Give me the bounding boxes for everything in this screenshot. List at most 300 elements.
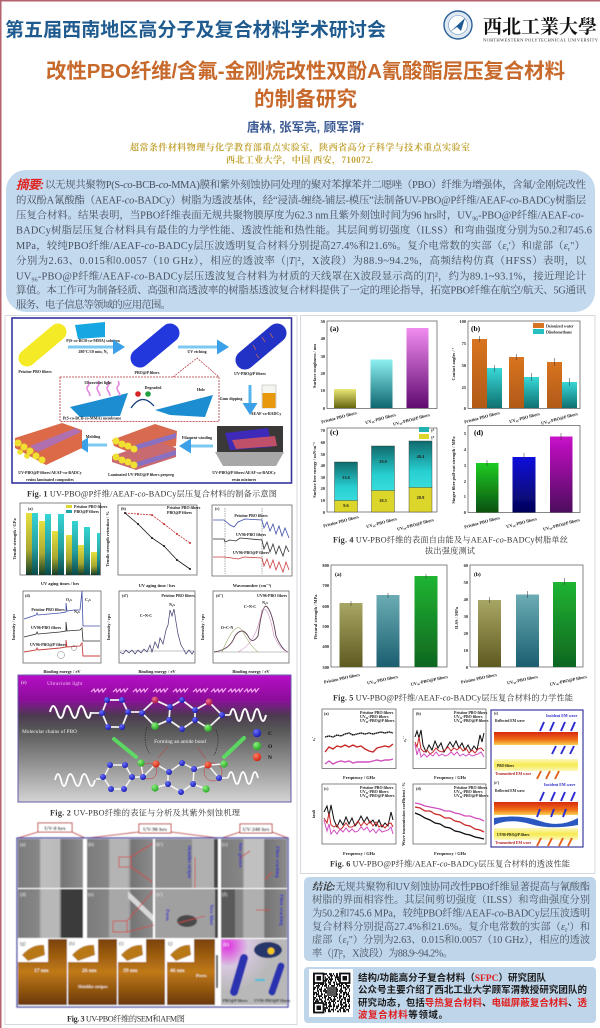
chart: loss tangent (c) — [311, 784, 396, 856]
chart: transmission coefficient (d): UV₉₆-PBO fibers — [454, 789, 483, 794]
chart: real permittivity (a): UV₉₆-PBO@P fibers — [360, 718, 395, 723]
chart: contact angle (b): UV₉₆-PBO fibers — [509, 411, 541, 424]
chart: FTIR spectra (c): (c) — [215, 506, 220, 511]
chart: surface free energy (c): 60 — [321, 440, 326, 445]
chart: XPS N1s pristine (d'): Pristine PBO fibers — [161, 593, 195, 598]
chart: contact angle (b): UV₉₆-PBO@P fibers — [540, 411, 579, 426]
chart: contact angle (b): 50 — [462, 363, 467, 368]
affiliation: 西北工业大学，中国 西安，710072. — [226, 154, 373, 166]
figure 2: characterisation charts — [11, 503, 292, 674]
chart: XPS N1s pristine (d'): (d') — [122, 593, 129, 598]
chart: strength retention lines (b): PBO@P fibers — [167, 510, 192, 515]
university logo — [444, 11, 599, 42]
icon: PBO@P fiber — [135, 333, 170, 375]
callout: UV etching mechanism: P(S-co-BCB-co-MMA) membrane — [63, 416, 121, 420]
conclusion text: 结论:无规共聚物和UV刻蚀协同改性PBO纤维显著提高与氰酸酯 — [312, 880, 590, 893]
icon: laminated prepreg: Laminated UV-PBO@P fibers prepreg — [108, 472, 174, 477]
icon: PBO@P fiber: PBO@P fibers — [135, 370, 160, 375]
chart: ILSS (b): 0 — [466, 665, 469, 670]
abstract text: UV — [16, 272, 31, 282]
chart: transmission coefficient (d): UV₉₆-PBO@P fibers — [454, 793, 489, 798]
chart: imaginary permittivity (b): UV₉₆-PBO@P fibers — [454, 718, 489, 723]
chart: surface roughness (a): 30 — [321, 354, 326, 359]
icon: resin tray: resin mixtures — [232, 477, 257, 482]
chart: pull-out strength (d): 1 — [464, 494, 466, 499]
AFM images: (i) — [119, 942, 124, 947]
chart: surface free energy (c): Pristine PBO fibers — [323, 514, 360, 528]
caption: fig 6: Fig. 6 UV-PBO@P纤维/AEAF-co-BADCy层压复合材料的透波性能 — [330, 858, 570, 868]
abstract text: 96 — [31, 278, 38, 284]
figure 3: SEM and AFM — [17, 823, 290, 1007]
callout: UV etching mechanism: Degraded — [145, 385, 162, 390]
abstract text: r — [507, 247, 509, 253]
chart: real permittivity (a): Frequency / GHz — [343, 775, 375, 780]
chart: FTIR spectra (c) — [212, 505, 292, 588]
chart: loss tangent (c): (c) — [324, 786, 329, 791]
chart: tensile strength bars (a): Pristine PBO fibers — [74, 504, 108, 509]
caption: fig 2: Fig. 2 UV-PBO纤维的表征与分析及其紫外刻蚀机理 — [50, 808, 241, 818]
conclusion text — [312, 880, 590, 960]
poster title: 的制备研究 — [254, 87, 357, 111]
chart: XPS N1s UV (d''): UV96-PBO fibers — [257, 593, 287, 598]
chart: pull-out strength (d): 3 — [464, 463, 467, 468]
schematic: EM wave transmission (e): Transmitted EM wave — [495, 841, 532, 845]
chart: XPS N1s pristine (d') — [106, 591, 195, 674]
chart: XPS N1s UV (d''): Intensity / cps — [200, 614, 205, 640]
abstract text: MPa，较纯PBO纤维/AEAF-co-BADCy层压波透明复合材料分别提高27.4%和21.6%。复介电常数的实部（ε — [16, 241, 506, 252]
chart: XPS survey (d): UV96-PBO@P fibers — [30, 642, 66, 647]
team description: 波复合材料等领域。 — [358, 1009, 448, 1021]
chart: surface free energy (c): UV₉₆-PBO fibers — [366, 516, 398, 529]
abstract text: ε — [564, 241, 569, 252]
figure 4: surface properties — [312, 319, 581, 532]
chart: flexural strength (a) — [313, 563, 448, 687]
chart: surface free energy (c): 38.0 — [379, 459, 388, 464]
abstract text: 的双酚A氰酸酯（AEAF-co-BADCy）树脂为透波基体，经“浸渍-缠绕-铺层-模压”法制备UV-PBO@P纤维/AEAF-co-BADCy树脂层 — [16, 194, 587, 206]
conclusion text: 复合材料分别提高27.4%和21.6%。复介电常数的实部（ε — [312, 922, 565, 933]
chart: surface free energy (c) — [312, 427, 437, 532]
QR code — [309, 969, 353, 1017]
UV light label: Ultraviolet light — [47, 681, 83, 687]
team description: 研究动态，包括导热复合材料、电磁屏蔽复合材料、透 — [358, 997, 587, 1009]
schematic k: fiber etching: (k) — [223, 943, 229, 948]
chart: surface free energy (c): 40 — [321, 463, 326, 468]
abstract text: 以无规共聚物P(S-co-BCB-co-MMA)膜和紫外刻蚀协同处理的聚对苯撑苯并二噁唑（PBO）纤维为增强体，含氟/金刚烷改性 — [45, 178, 587, 191]
affiliation — [130, 142, 470, 166]
abstract text — [16, 178, 592, 311]
amide bond annotation: Forming an amide bond — [154, 739, 206, 745]
chart: imaginary permittivity (b): εᵣ'' — [402, 736, 407, 742]
chart: surface free energy (c): 50 — [321, 452, 326, 457]
chart: flexural strength (a): UV₉₆-PBO fibers — [367, 674, 398, 685]
chart: ILSS (b): 40 — [464, 597, 469, 602]
chart: surface roughness (a): (a) — [330, 324, 339, 333]
chart: imaginary permittivity (b): (b) — [416, 711, 422, 716]
chart: surface free energy (c): 18.5 — [379, 498, 388, 503]
chart: flexural strength (a): Pristine PBO fibers — [323, 672, 360, 685]
AFM images — [18, 939, 218, 1005]
chart: XPS survey (d): N₁s — [74, 609, 80, 614]
chart: surface free energy (c): 9.6 — [343, 503, 350, 508]
chart: ILSS (b): 30 — [464, 614, 469, 619]
chart: flexural strength (a): 400 — [322, 644, 330, 649]
time labels: UV-0 hrs — [44, 826, 66, 832]
panel letter: (e) — [21, 681, 27, 686]
legend: atoms: C — [268, 731, 272, 737]
callout: UV etching mechanism — [60, 358, 219, 422]
chart: XPS N1s pristine (d'): C=N-C — [140, 613, 152, 618]
arrow: molding — [79, 434, 107, 445]
abstract label: 摘要: — [16, 178, 44, 192]
chart: flexural strength (a): (a) — [335, 571, 342, 578]
panel: conclusion — [304, 877, 596, 961]
SEM image grid: (a) — [20, 843, 26, 848]
chart: tensile strength bars (a): Tensile strength / GPa — [12, 518, 17, 560]
chart: strength retention lines (b): UV aging time / hrs — [139, 583, 176, 588]
schematic: EM wave transmission (e): Reflected EM wave — [495, 719, 525, 723]
chart: surface free energy (c): 10 — [321, 498, 326, 503]
chart: ILSS (b): 50 — [464, 580, 469, 585]
chart: XPS N1s UV (d'') — [200, 591, 289, 674]
green etching beams — [114, 738, 244, 757]
abstract text: BADCy树脂层压复合材料具有最佳的力学性能、透波性能和热性能。其层间剪切强度（ILSS）和弯曲强度分别为50.2和745.6 — [16, 224, 592, 236]
chart: surface roughness (a): UV₉₆-PBO fibers — [365, 412, 397, 425]
SEM image grid: (d) — [20, 893, 26, 898]
schematic: EM wave transmission (e): Incident EM wave — [544, 782, 576, 787]
abstract text: 算值。本工作可为制备轻质、高强和高透波率的树脂基透波复合材料提供了一定的理论指导，拓宽PBO纤维在航空/航天、5G通讯 — [16, 284, 587, 296]
icon: UV-PBO@P fiber: UV-PBO@P fibers — [234, 371, 266, 376]
chart: pull-out strength (d): 5 — [464, 431, 467, 436]
team description — [358, 972, 587, 1021]
abstract text: -PBO@P纤维/AEAF- — [478, 208, 571, 222]
chart: ILSS (b): 10 — [464, 648, 469, 653]
conference heading: 第五届西南地区高分子及复合材料学术研讨会 — [5, 18, 386, 41]
chart: XPS N1s pristine (d'): Intensity / cps — [106, 614, 111, 640]
schematic: EM wave transmission (e): UV96-PBO@P fibers — [497, 833, 530, 837]
chart: surface free energy (c): γᵈ — [430, 428, 435, 432]
AFM images: (g) — [20, 942, 26, 947]
arrow: filament winding — [182, 435, 213, 446]
icon: resin tray: UV-PBO@P fibers/AEAF-co-BADCy — [212, 470, 276, 475]
conclusion text: r — [565, 926, 568, 934]
SEM image grid: Pores — [164, 909, 169, 921]
chart: pull-out strength (d): 4 — [464, 447, 467, 452]
chart: XPS survey (d): UV96-PBO fibers — [31, 625, 61, 630]
chart: FTIR spectra (c): Pristine PBO fibers — [234, 513, 268, 518]
chart: contact angle (b): 0 — [464, 406, 467, 411]
chart: tensile strength bars (a): UV aging times / hrs — [41, 581, 79, 586]
chart: imaginary permittivity (b): UV₉₆-PBO fibers — [454, 714, 483, 719]
chart: surface roughness (a): 20 — [321, 371, 326, 376]
SEM image grid: (e) — [88, 893, 94, 898]
callout: UV etching mechanism: Ultraviolet light — [84, 380, 112, 385]
chart: real permittivity (a): UV₉₆-PBO fibers — [360, 714, 389, 719]
chart: strength retention lines (b): (b) — [121, 506, 127, 511]
time labels: UV-96 hrs — [143, 827, 167, 833]
icon: laminated prepreg — [108, 424, 177, 477]
icon: pristine PBO fiber — [18, 332, 58, 374]
poster title: 改性PBO纤维/含氟-金刚烷改性双酚A氰酸酯层压复合材料 — [46, 59, 566, 83]
chart: XPS survey (d) — [11, 591, 101, 674]
amide bond annotation — [141, 727, 222, 781]
AFM images: 39 nm — [123, 968, 138, 974]
chart: surface roughness (a): 40 — [321, 336, 326, 341]
callout: UV etching mechanism: Hole — [197, 387, 205, 392]
chart: contact angle (b): Deionized water — [546, 324, 574, 328]
figure 2 panel e: UV etching mechanism — [18, 675, 291, 802]
SEM image grid: Fiber cracking — [274, 846, 279, 878]
chart: contact angle (b): Pristine PBO fibers — [464, 410, 501, 424]
conclusion text: 率（|T|²，X波段）为88.9~94.2%。 — [312, 946, 453, 960]
schematic: EM wave transmission (e): Reflected EM wave — [495, 789, 525, 793]
chart: surface free energy (c): UV₉₆-PBO@P fibers — [396, 517, 435, 532]
chart: transmission coefficient (d): Frequency / GHz — [434, 851, 466, 856]
caption: fig 1: Fig. 1 UV-PBO@P纤维/AEAF-co-BADCy层压复合材料的制备示意图 — [27, 488, 277, 498]
team description: 结构/功能高分子复合材料（SFPC）研究团队 — [358, 972, 546, 984]
chart: surface free energy (c): (c) — [330, 428, 339, 436]
arrow: filament winding: Filament winding — [182, 435, 212, 440]
AFM images: 26 nm — [82, 968, 97, 974]
chart: ILSS (b): 20 — [464, 631, 469, 636]
chart: pull-out strength (d): UV₉₆-PBO@P fibers — [542, 517, 581, 532]
chart: flexural strength (a): Flexural strength / MPa — [313, 594, 318, 639]
chart: loss tangent (c): UV₉₆-PBO fibers — [360, 789, 389, 794]
chart: XPS survey (d): Pristine PBO fibers — [31, 607, 65, 612]
chart: contact angle (b): Contact angles / ° — [451, 347, 456, 380]
SEM image grid: Fiber cracking — [278, 894, 283, 926]
chart: strength retention lines (b) — [105, 505, 201, 588]
chart: surface free energy (c): 30 — [321, 475, 326, 480]
molecule: PBO chain before etching — [50, 696, 266, 732]
AFM images: (h) — [69, 942, 75, 947]
schematic: EM wave transmission (e): (e) — [494, 712, 499, 716]
chart: loss tangent (c): tanδ — [311, 809, 316, 818]
chart: surface roughness (a): Surface roughness / nm — [312, 344, 317, 388]
SEM image grid: Skinlike stripes — [186, 846, 191, 879]
caption: fig 4 — [333, 534, 568, 556]
abstract text: 96 — [472, 216, 478, 222]
chart: XPS N1s pristine (d'): N₁s — [169, 602, 175, 607]
chart: imaginary permittivity (b): Frequency / GHz — [434, 775, 466, 780]
icon: laminated composite — [14, 423, 82, 482]
abstract text: "） — [570, 240, 585, 252]
chart: pull-out strength (d): 2 — [464, 479, 466, 484]
chart: XPS N1s UV (d''): O=C-N — [221, 625, 233, 630]
chart: loss tangent (c): UV₉₆-PBO@P fibers — [360, 793, 395, 798]
icon: UV-PBO@P fiber — [234, 333, 277, 376]
molecule: chain after etching — [55, 759, 258, 795]
arrow: coating — [68, 346, 122, 348]
figure 5: mechanical properties — [313, 563, 587, 687]
abstract text: co-BADCy层压透波复合材料为材质的天线罩在X波段显示高的|T|²，约为89.1~93.1%，接近理论计 — [134, 272, 586, 282]
chart: surface roughness (a): 10 — [321, 388, 326, 393]
icon: pristine PBO fiber: Pristine PBO fibers — [18, 369, 52, 374]
chart: XPS survey (d): Intensity / cps — [11, 614, 16, 640]
chart: XPS survey (d): C₁s — [85, 597, 91, 602]
icon: polymer solution block: 280°C/10 min, N₂ — [78, 349, 108, 354]
chart: flexural strength (a): 500 — [322, 624, 330, 629]
schematic: EM wave transmission (e): PBO fibers — [497, 764, 515, 768]
chart: contact angle (b): (b) — [471, 324, 481, 333]
SEM image grid: (b) — [88, 843, 94, 848]
abstract text: r — [568, 247, 570, 253]
SEM image grid: New groove — [237, 842, 242, 868]
AFM images: Skinlike stripes — [78, 984, 108, 989]
chart: real permittivity (a) — [311, 709, 396, 780]
arrow: gum dipping — [220, 385, 250, 412]
authors: 唐林, 张军亮, 顾军渭 — [247, 120, 361, 134]
chart: flexural strength (a): 300 — [322, 665, 330, 670]
chart: surface free energy (c): 20 — [321, 486, 326, 491]
chart: imaginary permittivity (b) — [402, 709, 489, 780]
chart: real permittivity (a): Pristine PBO fibers — [360, 710, 394, 715]
chart: tensile strength bars (a) — [12, 503, 108, 586]
chart: FTIR spectra (c): UV96-PBO@P fibers — [233, 550, 269, 555]
poster title — [46, 59, 566, 111]
chart: ILSS (b): Pristine PBO fibers — [460, 672, 497, 685]
caption: fig 4: Fig. 4 UV-PBO纤维的表面自由能及与AEAF-co-BADCy树脂单丝 — [333, 534, 568, 544]
abstract text: 分别为2.63、0.015和0.0057（10 GHz），相应的透波率（|T|²，X波段）为88.9~94.2%，高频结构仿真（HFSS）表明，以 — [16, 254, 587, 267]
chart: surface free energy (c): 70 — [321, 428, 326, 433]
chart: surface roughness (a): 0 — [323, 406, 326, 411]
university english name: NORTHWESTERN POLYTECHNICAL UNIVERSITY — [483, 38, 599, 42]
icon: university emblem — [444, 11, 472, 39]
figure 6: wave transmission — [311, 709, 583, 856]
chart: XPS N1s UV (d''): Binding energy / eV — [232, 669, 270, 674]
chart: transmission coefficient (d): Wave transmission coefficient / % — [401, 782, 406, 846]
affiliation: 超常条件材料物理与化学教育部重点实验室，陕西省高分子科学与技术重点实验室 — [130, 142, 470, 154]
chart: contact angle (b): 75 — [462, 341, 467, 346]
AFM images: (j) — [168, 942, 173, 947]
caption: fig 5: Fig. 5 UV-PBO@P纤维/AEAF-co-BADCy层压复合材料的力学性能 — [333, 692, 573, 702]
chart: real permittivity (a): (a) — [324, 711, 329, 716]
chart: flexural strength (a): 800 — [322, 563, 330, 568]
chart: contact angle (b) — [451, 319, 580, 426]
chart: XPS survey (d): O₁s — [66, 597, 72, 602]
chart: pull-out strength (d) — [451, 426, 581, 532]
chart: tensile strength bars (a): (a) — [28, 506, 33, 511]
conclusion text: 虚部（ε — [312, 935, 346, 946]
authors: * — [361, 122, 364, 130]
panel: research team — [304, 967, 596, 1023]
molecular chain label: Molecular chains of PBO — [22, 728, 77, 735]
icon: polymer solution block — [66, 322, 120, 354]
SEM image grid: New fiber — [208, 905, 213, 926]
chart: surface free energy (c): 40.4 — [417, 454, 425, 459]
arrow: molding: Molding — [86, 434, 100, 439]
panel: abstract — [6, 170, 595, 312]
icon: polymer solution block: P(S-co-BCB-co-MMA) solution — [66, 338, 120, 343]
chart: surface roughness (a): 50 — [321, 319, 326, 324]
conclusion text: "）分别为2.63、0.015和0.0057（10 GHz），相应的透波 — [349, 933, 590, 946]
schematic: EM wave transmission (e): Transmitted EM wave — [495, 772, 532, 776]
arrow: UV etching — [178, 347, 226, 354]
chart: flexural strength (a): UV₉₆-PBO@P fibers — [410, 674, 448, 687]
arrow: UV etching: UV etching — [187, 349, 207, 354]
chart: surface free energy (c): 33.6 — [342, 475, 351, 480]
chart: flexural strength (a): 600 — [322, 604, 330, 609]
abstract text: '）和虚部（ — [509, 239, 564, 252]
chart: contact angle (b): Diiodomethane — [546, 330, 572, 334]
team description: 公众号主要介绍了西北工业大学顾军渭教授研究团队的 — [358, 984, 587, 996]
chart: strength retention lines (b): Tensile strength retention / % — [105, 511, 110, 567]
panel: right figures card — [300, 316, 595, 874]
chart: surface roughness (a): Pristine PBO fibers — [321, 410, 358, 424]
caption: fig 4: 拔出强度测试 — [425, 546, 475, 556]
chart: flexural strength (a): 700 — [322, 583, 330, 588]
chart: transmission coefficient (d): Pristine PBO fibers — [454, 785, 488, 790]
AFM images: Pores — [196, 973, 207, 978]
chart: strength retention lines (b): Pristine PBO fibers — [167, 505, 201, 510]
chart: pull-out strength (d): Pristine PBO fibers — [464, 515, 501, 529]
chart: contact angle (b): 100 — [459, 319, 467, 324]
university name: 西北工業大學 — [483, 16, 597, 38]
abstract text: -PBO@P纤维/AEAF- — [38, 270, 134, 282]
chart: XPS survey (d): (d) — [25, 593, 31, 598]
chart: ILSS (b): ILSS / MPa — [454, 606, 459, 629]
chart: imaginary permittivity (b): Pristine PBO fibers — [454, 710, 488, 715]
conclusion text: 为50.2和745.6 MPa，较纯PBO纤维/AEAF-co-BADCy层压波透明 — [312, 906, 590, 920]
SEM image grid — [17, 838, 288, 1007]
chart: XPS survey (d): Binding energy / eV — [43, 669, 81, 674]
chart: surface free energy (c): γᵖ — [430, 434, 435, 440]
legend: atoms: N — [268, 755, 272, 761]
chart: XPS N1s UV (d''): N₁s — [262, 600, 268, 605]
AFM images: 17 nm — [34, 968, 49, 974]
chart: pull-out strength (d): Singer fiber pull-out strength / MPa — [451, 436, 456, 504]
chart: surface free energy (c): 20.9 — [417, 495, 425, 500]
AFM images: 46 nm — [170, 968, 185, 974]
time labels: UV-240 hrs — [243, 827, 269, 833]
schematic: EM wave transmission (e): (e') — [494, 781, 500, 785]
caption: fig 3: Fig. 3 UV-PBO纤维的SEM和AFM图 — [67, 1014, 185, 1024]
conclusion text: '）和 — [568, 921, 590, 933]
UV rays — [91, 688, 259, 692]
schematic: EM wave transmission (e) — [491, 710, 583, 847]
chart: real permittivity (a): εᵣ' — [311, 737, 316, 741]
SEM image grid: (b') — [156, 843, 163, 848]
panel: left figures card — [5, 316, 297, 1024]
time labels — [18, 823, 288, 838]
chart: transmission coefficient (d): (d) — [416, 786, 422, 791]
schematic k: fiber etching: UV96-PBO@P fibers — [254, 998, 290, 1003]
chart: tensile strength bars (a): PBO@P fibers — [74, 509, 99, 514]
arrow: gum dipping: Gum dipping — [220, 396, 242, 401]
chart: pull-out strength (d): UV₉₆-PBO fibers — [506, 516, 538, 529]
chart: ILSS (b): 60 — [464, 563, 469, 568]
conclusion text: 树脂的界面相容性。其层间剪切强度（ILSS）和弯曲强度分别 — [312, 893, 590, 906]
icon: laminated composite: UV-PBO@P fibers/AEAF-co-BADCy — [18, 470, 82, 475]
chart: FTIR spectra (c): Wavenumber (cm⁻¹) — [233, 583, 272, 588]
chart: ILSS (b): UV₉₆-PBO@P fibers — [549, 674, 587, 687]
chart: ILSS (b) — [454, 563, 587, 687]
chart: XPS N1s UV (d''): C=N-C — [244, 604, 256, 609]
chart: transmission coefficient (d) — [401, 782, 489, 856]
schematic: EM wave transmission (e): Incident EM wave — [546, 713, 578, 718]
schematic k: fiber etching — [221, 939, 290, 1005]
chart: surface roughness (a) — [312, 319, 437, 427]
chart: surface roughness (a): UV₉₆-PBO@P fibers — [392, 412, 431, 427]
abstract text: 压复合材料。结果表明，当PBO纤维表面无规共聚物膜厚度为62.3 nm且紫外刻蚀时间为96 hrs时，UV — [16, 210, 472, 222]
chart: pull-out strength (d): (d) — [474, 428, 484, 437]
chart: XPS N1s pristine (d'): Binding energy / eV — [138, 669, 176, 674]
icon: resin tray — [212, 426, 284, 482]
chart: ILSS (b): UV₉₆-PBO fibers — [507, 674, 538, 685]
icon: beaker with resin: AEAF-co-BADCy — [251, 411, 281, 416]
abstract text: 服务、电子信息等领域的应用范围。 — [16, 298, 171, 311]
abstract text: co- — [571, 210, 584, 222]
chart: pull-out strength (d): 0 — [464, 510, 467, 515]
